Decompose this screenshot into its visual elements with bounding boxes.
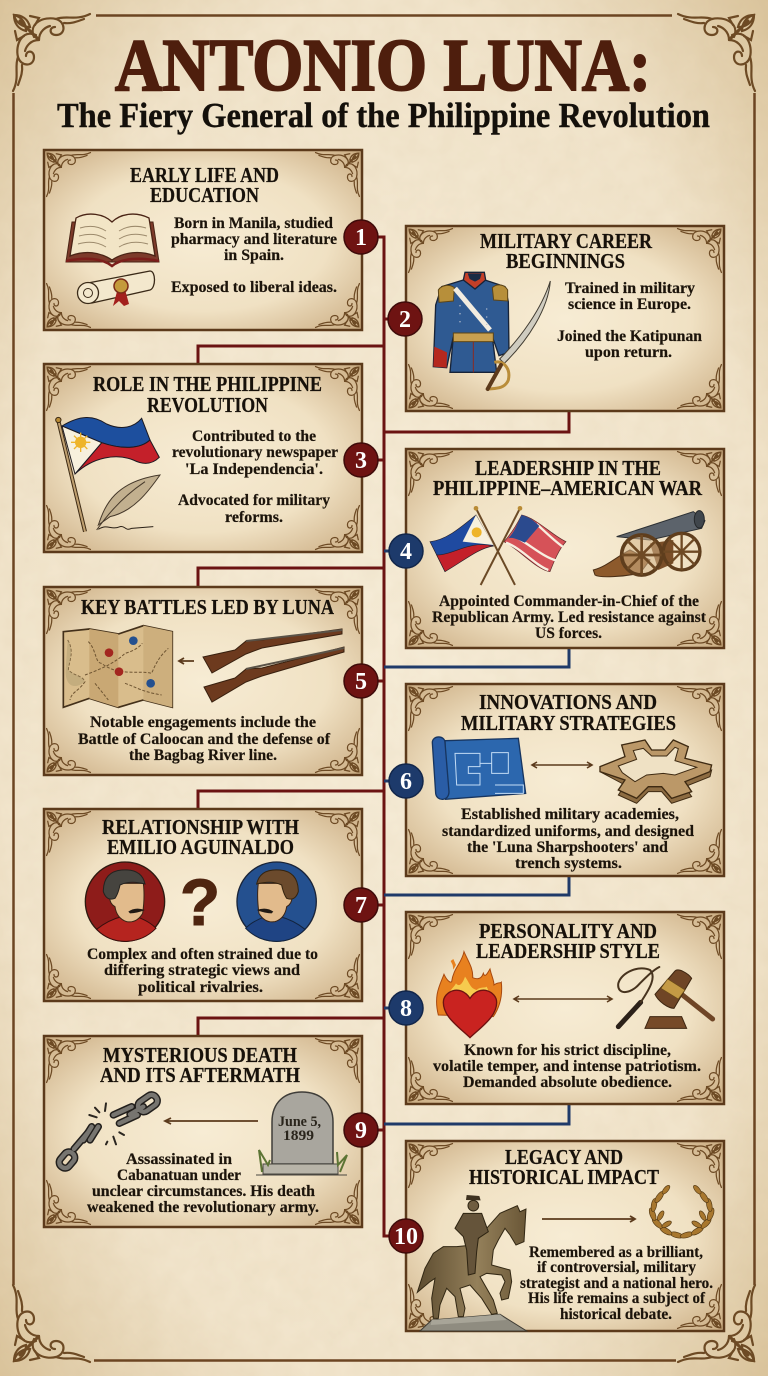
body text: Appointed Commander-in-Chief of the (439, 593, 699, 610)
title: ANTONIO LUNA: (115, 25, 651, 107)
body text: Joined the Katipunan (557, 328, 702, 345)
icon: cannon (593, 511, 705, 577)
body text: His life remains a subject of (528, 1290, 706, 1307)
body text: revolutionary newspaper (172, 444, 338, 461)
heading (102, 815, 299, 859)
heading: ROLE IN THE PHILIPPINE (93, 372, 322, 396)
icon: diploma scroll (78, 271, 154, 306)
badge 6: 6 (400, 769, 412, 795)
body text: if controversial, military (537, 1259, 696, 1276)
heading: HISTORICAL IMPACT (469, 1165, 659, 1189)
heading (100, 1043, 300, 1087)
heading: LEADERSHIP STYLE (476, 939, 660, 963)
icon: open book (66, 214, 159, 266)
body text (557, 280, 702, 361)
body text: trench systems. (515, 855, 622, 872)
body text: differing strategic views and (104, 962, 300, 979)
icon: gavel (645, 970, 713, 1028)
body text (87, 1151, 319, 1216)
heading: MILITARY STRATEGIES (461, 711, 676, 735)
badge 4: 4 (400, 539, 412, 565)
icon: broken chain (57, 1093, 159, 1170)
icon: crossed flags (430, 506, 566, 585)
body text (442, 806, 694, 872)
icon: laurel wreath (648, 1184, 715, 1239)
badge 7 (344, 888, 378, 922)
badge 4 (389, 534, 423, 568)
icon: flaming heart (437, 952, 502, 1038)
body text: Advocated for military (178, 492, 330, 509)
badge 8: 8 (400, 996, 412, 1022)
body text: reforms. (225, 509, 283, 526)
body text: upon return. (585, 344, 672, 361)
arrow (532, 762, 592, 768)
icon: quill (97, 475, 160, 530)
body text: Contributed to the (192, 428, 316, 445)
panel 8: personality and leadership style (406, 912, 724, 1104)
icon: military uniform (433, 272, 509, 372)
body text (87, 946, 318, 996)
body text: Notable engagements include the (90, 714, 316, 731)
heading (433, 456, 703, 500)
panel 9: mysterious death and its aftermath (44, 1036, 362, 1227)
badge 3 (344, 443, 378, 477)
heading: PHILIPPINE–AMERICAN WAR (433, 476, 703, 500)
body text: Complex and often strained due to (87, 946, 318, 963)
badge 7: 7 (355, 893, 367, 919)
badge 6 (389, 764, 423, 798)
body text: political rivalries. (138, 979, 263, 996)
badge 5 (344, 664, 378, 698)
icon: sword (488, 281, 550, 389)
body text: the 'Luna Sharpshooters' and (467, 839, 668, 856)
icon: Aguinaldo portrait (237, 862, 316, 941)
badge 10: 10 (394, 1224, 418, 1250)
heading: INNOVATIONS AND (479, 690, 657, 714)
heading: KEY BATTLES LED BY LUNA (81, 595, 335, 619)
body text: unclear circumstances. His death (92, 1183, 315, 1200)
badge 10 (389, 1219, 423, 1253)
body text: weakened the revolutionary army. (87, 1199, 319, 1216)
heading: EMILIO AGUINALDO (107, 835, 294, 859)
icon: blueprint (432, 737, 526, 799)
body text: Assassinated in (126, 1151, 232, 1168)
icon: Luna portrait (85, 862, 165, 941)
heading: LEADERSHIP IN THE (475, 456, 661, 480)
heading: RELATIONSHIP WITH (102, 815, 299, 839)
icon: Philippine flag (56, 417, 159, 532)
double arrow (514, 996, 612, 1002)
badge 9 (344, 1113, 378, 1147)
icon: question mark: ? (180, 865, 220, 939)
panel 3: role in the Philippine revolution (44, 364, 362, 552)
icon: whip (618, 967, 659, 1027)
badge 1: 1 (355, 225, 367, 251)
body text: US forces. (535, 625, 602, 642)
panel 6: innovations and military strategies (406, 684, 724, 876)
body text: Established military academies, (461, 806, 679, 823)
body text: Remembered as a brilliant, (529, 1244, 703, 1261)
body text: volatile temper, and intense patriotism. (433, 1058, 701, 1075)
body text: 'La Independencia'. (185, 461, 323, 478)
heading: PERSONALITY AND (479, 919, 657, 943)
badge 2 (388, 302, 422, 336)
gravestone: 1899 (283, 1128, 314, 1144)
body text: in Spain. (224, 247, 284, 264)
heading: AND ITS AFTERMATH (100, 1063, 300, 1087)
heading: LEGACY AND (505, 1145, 623, 1169)
heading: BEGINNINGS (506, 249, 625, 273)
icon: star fort (600, 740, 712, 803)
heading (469, 1145, 659, 1189)
badge 8 (389, 991, 423, 1025)
heading: EDUCATION (150, 183, 259, 207)
body text (433, 1042, 701, 1091)
heading (130, 163, 279, 207)
gravestone: June 5, (278, 1114, 321, 1130)
body text: Republican Army. Led resistance against (432, 609, 707, 626)
body text (171, 215, 337, 296)
panel 10: legacy and historical impact (406, 1141, 724, 1331)
badge 2: 2 (399, 307, 411, 333)
heading (476, 919, 660, 963)
icon: equestrian statue (417, 1195, 527, 1331)
body text: strategist and a national hero. (520, 1275, 713, 1292)
body text: Exposed to liberal ideas. (171, 279, 337, 296)
body text (172, 428, 338, 526)
icon: battle map (63, 626, 172, 707)
arrow (542, 1216, 635, 1222)
body text: pharmacy and literature (171, 231, 337, 248)
badge 5: 5 (355, 669, 367, 695)
icon: rifles (203, 629, 344, 702)
body text: standardized uniforms, and designed (442, 823, 694, 840)
subtitle: The Fiery General of the Philippine Revolution (57, 96, 710, 135)
body text: Demanded absolute obedience. (463, 1074, 672, 1091)
body text (520, 1244, 713, 1323)
panel 7: relationship with Emilio Aguinaldo (44, 809, 362, 1001)
body text: Trained in military (565, 280, 695, 297)
heading (480, 229, 653, 273)
heading: MILITARY CAREER (480, 229, 653, 253)
heading: MYSTERIOUS DEATH (103, 1043, 297, 1067)
badge 3: 3 (355, 448, 367, 474)
badge 1 (344, 220, 378, 254)
body text (432, 593, 707, 642)
body text: historical debate. (560, 1306, 672, 1323)
arrow (165, 1118, 258, 1124)
heading (93, 372, 322, 417)
body text: Cabanatuan under (117, 1167, 241, 1184)
body text (78, 714, 331, 764)
body text: Known for his strict discipline, (464, 1042, 671, 1059)
panel 4: leadership in the Philippine-American War (406, 449, 724, 648)
heading: EARLY LIFE AND (130, 163, 279, 187)
panel 5: key battles led by Luna (44, 587, 362, 775)
heading: REVOLUTION (147, 393, 268, 417)
body text: science in Europe. (568, 296, 691, 313)
timeline connectors (198, 237, 569, 1236)
body text: Born in Manila, studied (174, 215, 333, 232)
panel 2: military career beginnings (406, 226, 724, 411)
badge 9: 9 (355, 1118, 367, 1144)
panel 1: early life and education (44, 150, 362, 330)
heading (461, 690, 676, 735)
gravestone (256, 1092, 347, 1175)
arrow (179, 658, 194, 664)
body text: Battle of Caloocan and the defense of (78, 731, 331, 748)
body text: the Bagbag River line. (129, 747, 277, 764)
